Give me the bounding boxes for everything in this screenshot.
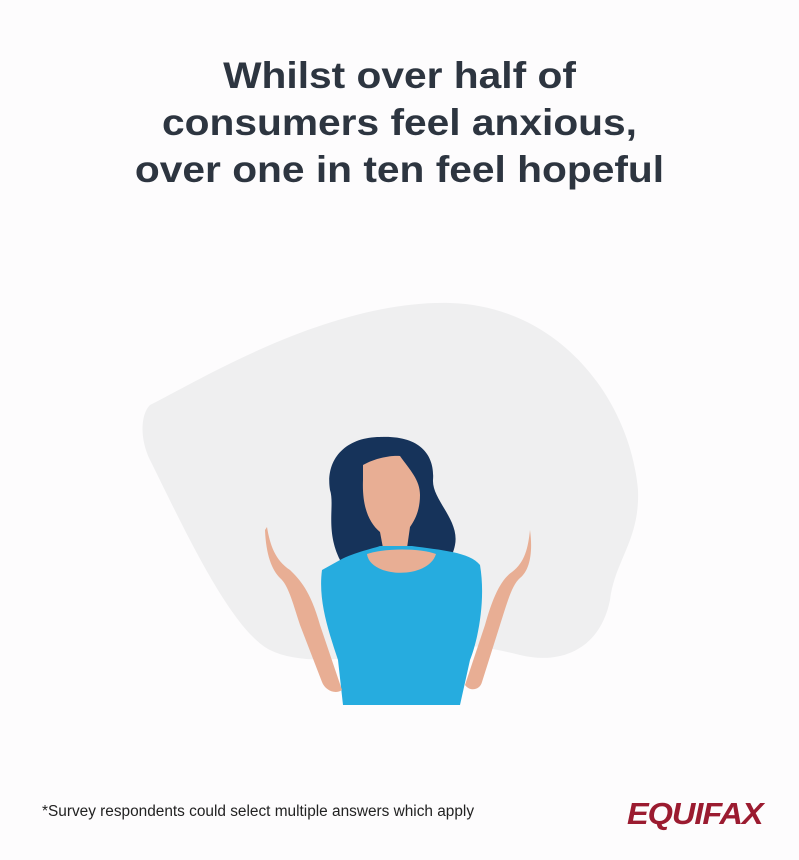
logo: Equifax: EQUIFAX [627, 796, 763, 831]
title: consumers feel anxious, [162, 102, 637, 143]
background blob [142, 303, 638, 659]
title: over one in ten feel hopeful [135, 149, 664, 190]
title [135, 55, 664, 190]
footnote: *Survey respondents could select multiple answers which apply [42, 803, 474, 820]
woman [265, 437, 531, 705]
title: Whilst over half of [223, 55, 576, 96]
